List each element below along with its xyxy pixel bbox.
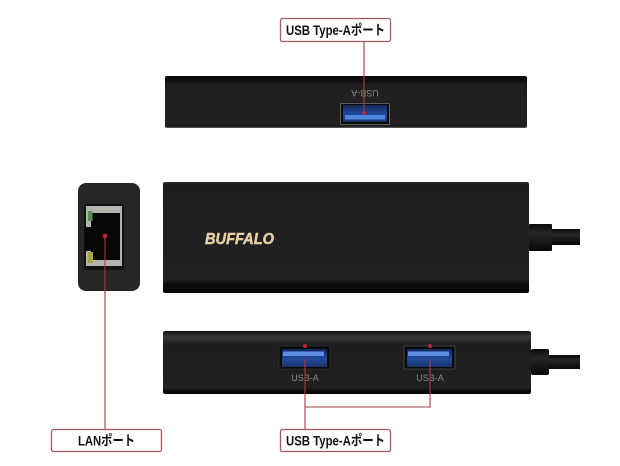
leader lines: bottom USB ports [303,344,432,429]
callout: LAN port [52,430,162,452]
text: rotated USB-A marking: USB-A [351,88,379,98]
device: LAN end view [78,183,140,291]
device: main side view with logo [163,182,529,293]
callout: top USB Type-A port: USB Type-Aポート [286,22,385,38]
leader line: LAN port [103,234,107,429]
leader line: top USB port [362,41,366,115]
callout: top USB Type-A port [280,18,390,42]
icon: USB port left [279,346,330,369]
callout: LAN port: LANポート [78,432,135,448]
cable: main view [529,224,580,251]
text: USB-A right marking: USB-A [416,373,444,383]
cable: bottom view [531,349,580,375]
logo: BUFFALO: BUFFALO [205,231,274,248]
device: top view [165,76,527,128]
icon: USB port right [404,346,455,369]
icon: RJ45 port [85,206,122,266]
icon: USB port top [340,104,390,124]
text: USB-A left marking: USB-A [291,373,319,383]
device: bottom view with two USB ports [163,331,531,394]
callout: bottom USB Type-A ports: USB Type-Aポート [286,432,385,448]
callout: bottom USB Type-A ports [280,430,390,452]
